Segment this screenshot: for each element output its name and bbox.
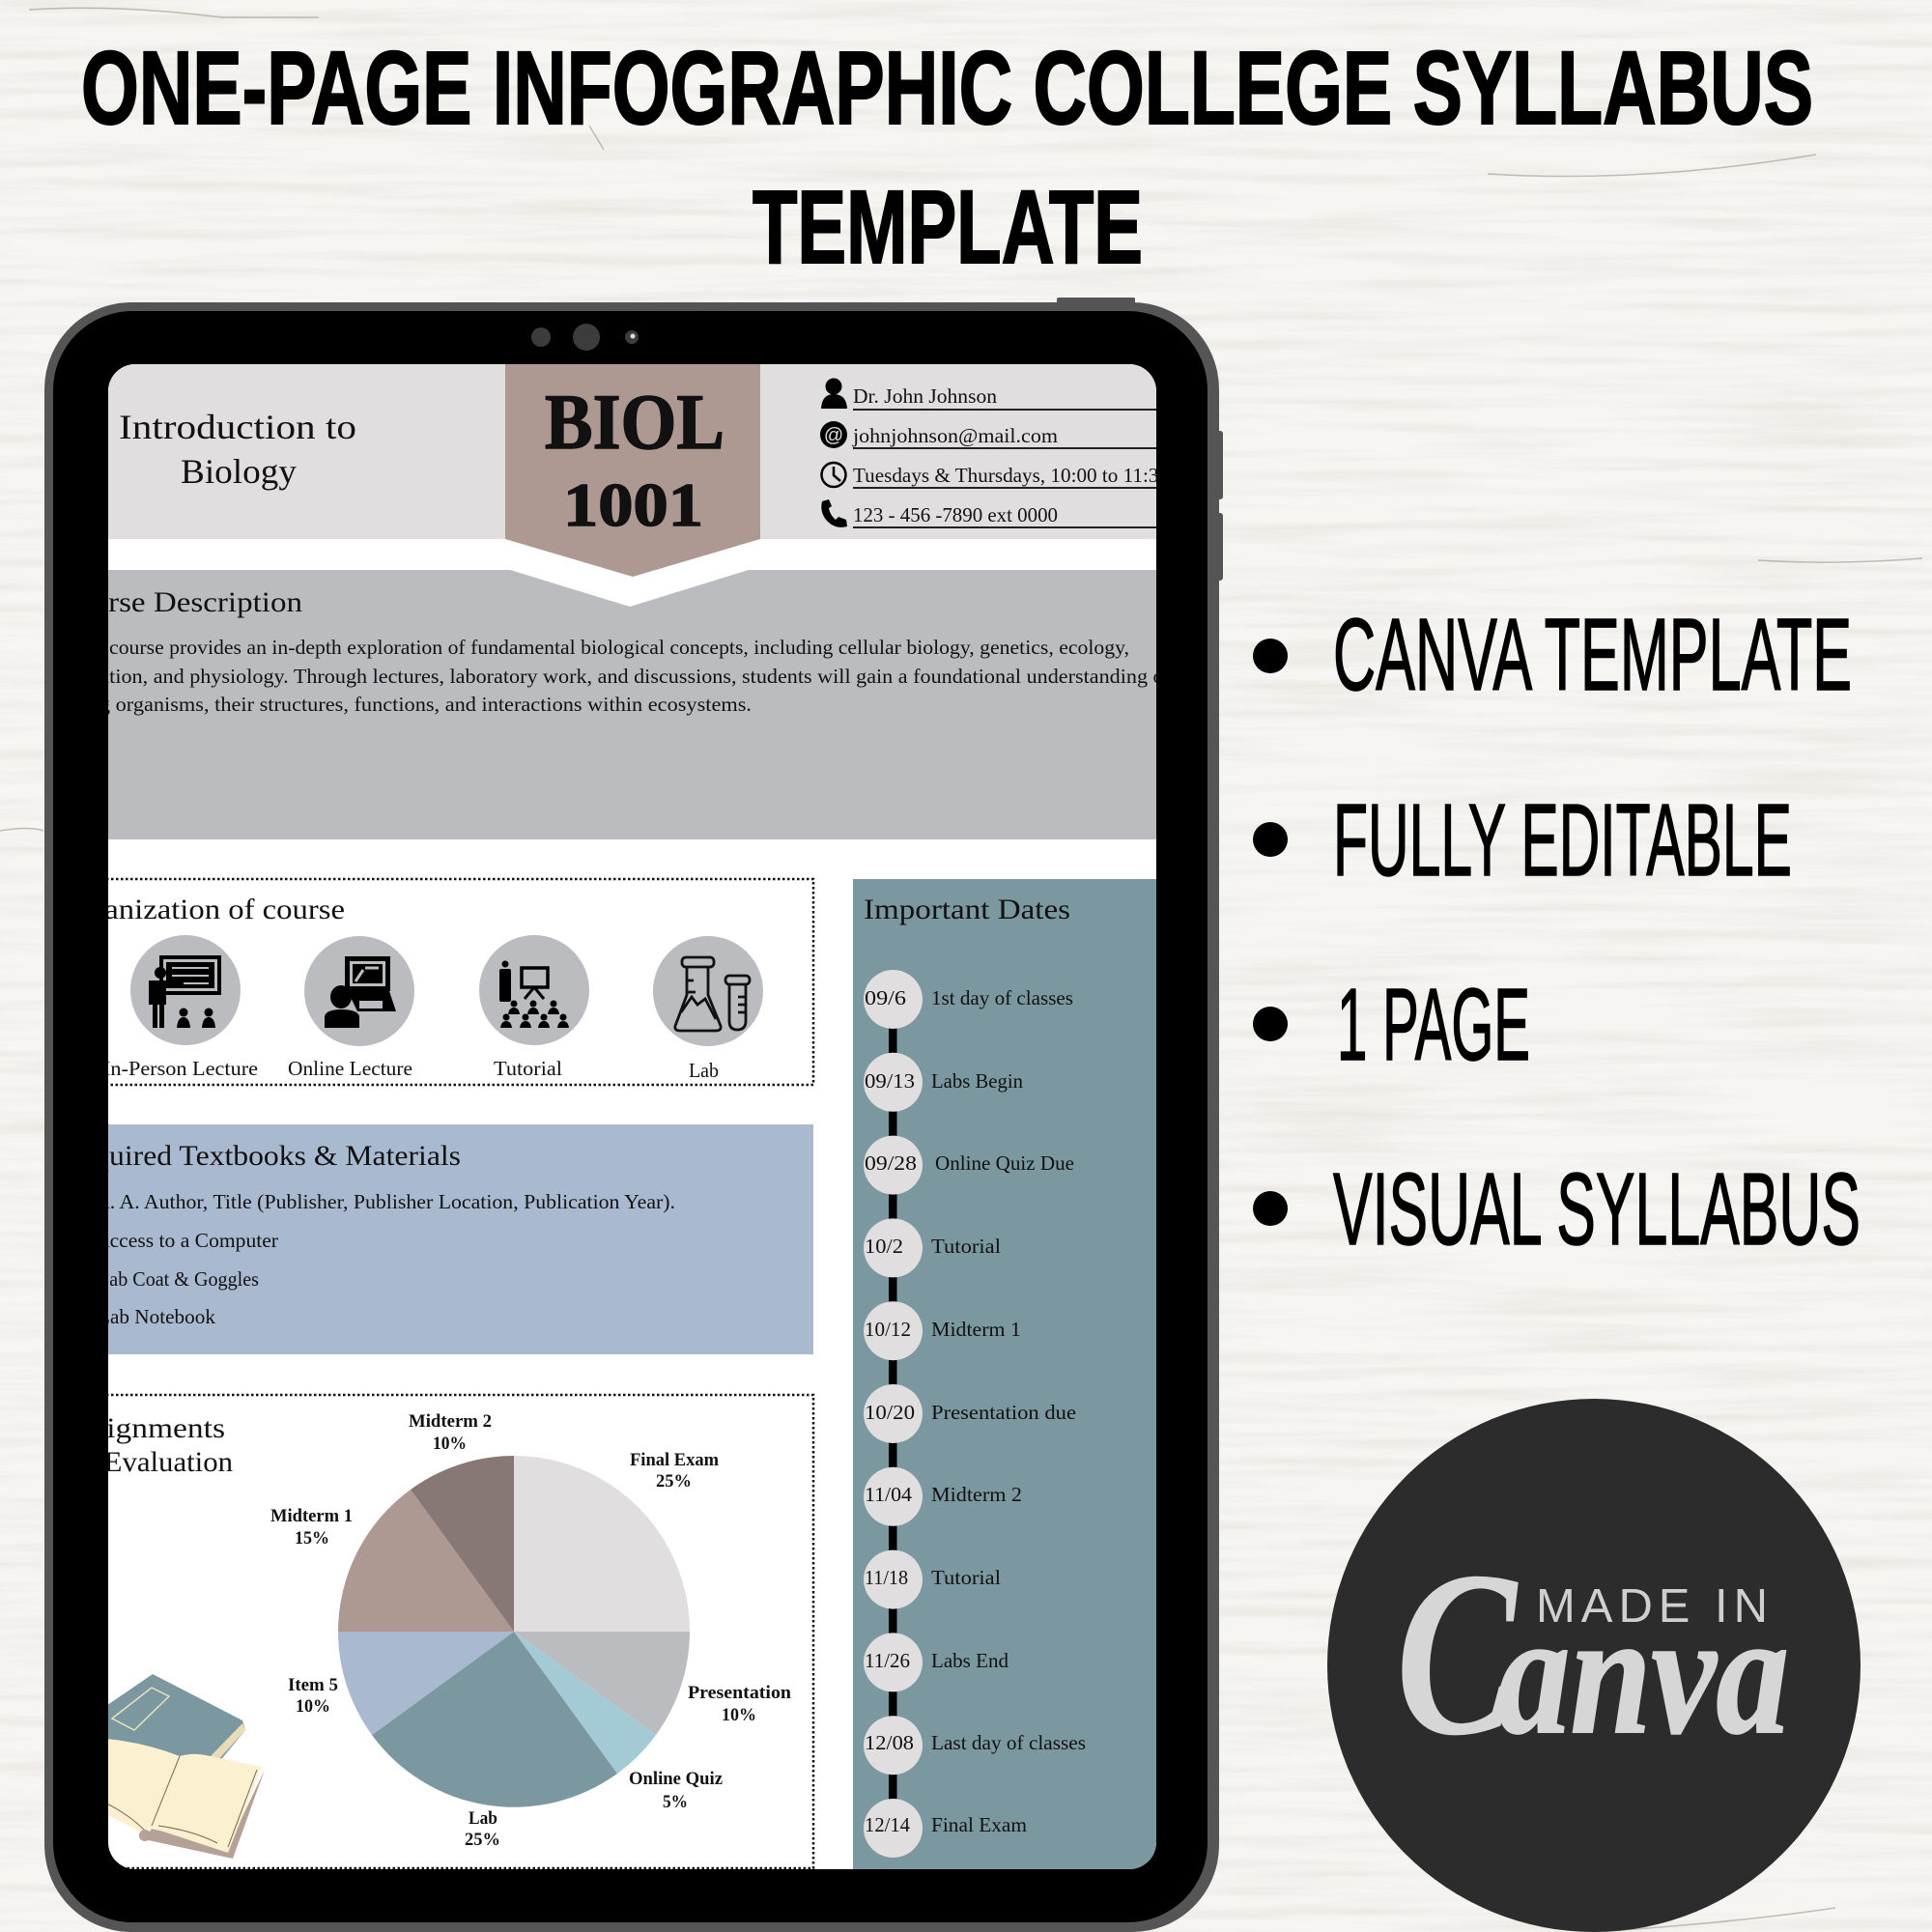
heading: course description: Course Description	[55, 586, 302, 618]
organization labels: Tutorial	[494, 1057, 562, 1080]
materials list: Lab Notebook	[98, 1305, 215, 1328]
date events: Labs Begin	[931, 1069, 1023, 1093]
course code banner: 1001	[563, 470, 703, 539]
pie labels: Online Quiz	[629, 1769, 724, 1789]
materials list: Lab Coat & Goggles	[98, 1267, 259, 1291]
illustration: books	[108, 1674, 265, 1859]
panel: course description	[55, 569, 1171, 839]
course name: Introduction to	[119, 408, 356, 446]
date events: Presentation due	[931, 1401, 1076, 1424]
contact details	[820, 379, 1169, 527]
class time: Tuesdays & Thursdays, 10:00 to 11:30	[853, 464, 1169, 487]
icon: online lecture	[304, 936, 414, 1046]
date labels: 12/08	[865, 1731, 914, 1754]
icon: phone	[821, 499, 847, 527]
pie labels: 15%	[295, 1528, 329, 1548]
pie labels: Final Exam	[630, 1450, 719, 1470]
timeline	[864, 970, 923, 1858]
pie labels	[270, 1411, 791, 1850]
materials list	[95, 1190, 675, 1328]
heading: assignments: & Evaluation	[73, 1446, 233, 1478]
date labels	[865, 986, 917, 1836]
icon: at sign	[820, 421, 847, 448]
heading: important dates: Important Dates	[864, 894, 1070, 925]
icon: person	[821, 379, 847, 409]
description text: evolution, and physiology. Through lectures, laboratory work, and discussions, students will gain a foundational understanding of	[62, 665, 1171, 688]
pie labels: Lab	[469, 1808, 497, 1829]
instructor name: Dr. John Johnson	[853, 384, 997, 408]
date labels: 09/28	[865, 1151, 917, 1175]
date events: Labs End	[931, 1649, 1009, 1672]
course name: Biology	[181, 452, 297, 491]
heading: textbooks: Required Textbooks & Materials	[60, 1140, 461, 1172]
email: johnjohnson@mail.com	[852, 424, 1058, 447]
description text: living organisms, their structures, functions, and interactions within ecosystems.	[60, 693, 752, 716]
pie labels: 5%	[663, 1792, 688, 1812]
course code banner	[505, 364, 760, 577]
heading: assignments	[108, 1418, 233, 1472]
icon: lab flasks	[653, 936, 763, 1046]
pie labels: 10%	[722, 1705, 756, 1725]
pie labels: 25%	[656, 1471, 692, 1492]
title	[81, 29, 1813, 285]
icon: clock	[821, 463, 846, 487]
description text	[108, 639, 1156, 715]
date events	[931, 986, 1086, 1836]
feature bullet list	[1253, 598, 1861, 1266]
phone number: 123 - 456 -7890 ext 0000	[853, 503, 1058, 526]
date labels: 10/2	[865, 1235, 903, 1258]
pie labels: Midterm 1	[270, 1506, 353, 1526]
organization labels: Online Lecture	[288, 1057, 412, 1080]
badge: made in canva: anva	[1497, 1577, 1789, 1770]
badge: made in canva: MADE IN	[1536, 1580, 1768, 1633]
course code banner: BIOL	[545, 378, 724, 466]
date events: 1st day of classes	[931, 986, 1073, 1009]
date labels: 12/14	[865, 1813, 910, 1836]
organization labels: Lab	[689, 1059, 719, 1082]
date labels: 09/13	[865, 1069, 915, 1093]
date events: Tutorial	[931, 1566, 1001, 1589]
date labels: 11/26	[865, 1649, 910, 1672]
icon: in-person lecture	[130, 935, 241, 1045]
heading: organization: Organization of course	[56, 894, 345, 925]
title: TEMPLATE	[753, 168, 1143, 285]
heading: assignments: Assignments	[58, 1412, 225, 1444]
bullet: 1 page	[1253, 968, 1530, 1082]
bullet: fully editable	[1253, 783, 1792, 897]
pie labels: Presentation	[688, 1683, 791, 1703]
pie labels: 10%	[296, 1696, 330, 1717]
bullet: 1 page: 1 PAGE	[1337, 968, 1530, 1082]
pie labels: Midterm 2	[409, 1411, 492, 1432]
date labels: 11/18	[865, 1566, 908, 1589]
date events: Online Quiz Due	[935, 1151, 1074, 1175]
date events: Final Exam	[931, 1813, 1027, 1836]
panel: header band	[108, 364, 1156, 539]
date labels: 10/20	[865, 1401, 915, 1424]
date events: Midterm 1	[931, 1318, 1021, 1341]
date events: Last day of classes	[931, 1731, 1086, 1754]
panel: required textbooks and materials	[60, 1124, 813, 1354]
organization labels	[108, 1061, 719, 1077]
description text: This course provides an in-depth exploration of fundamental biological concepts, including cellular biology, genetics, ecology,	[67, 636, 1129, 659]
date labels: 11/04	[865, 1483, 913, 1506]
date labels: 10/12	[865, 1318, 911, 1341]
tablet device	[44, 298, 1223, 1932]
pie labels: Item 5	[288, 1675, 338, 1695]
date labels: 09/6	[865, 986, 906, 1009]
icon: tutorial	[479, 935, 589, 1045]
icon: at sign: @	[824, 425, 843, 446]
pie chart	[338, 1456, 690, 1807]
date events: Midterm 2	[931, 1483, 1022, 1506]
course name	[119, 408, 356, 491]
organization labels: In-Person Lecture	[103, 1057, 258, 1080]
panel: assignments and evaluation	[58, 1395, 813, 1868]
badge: made in canva: C	[1396, 1522, 1519, 1784]
panel: important dates	[853, 879, 1156, 1869]
screen content	[55, 364, 1171, 1869]
materials list: Access to a Computer	[95, 1229, 278, 1252]
materials list: A. A. Author, Title (Publisher, Publisher Location, Publication Year).	[95, 1190, 675, 1213]
pie labels: 25%	[465, 1830, 500, 1850]
badge: made in canva	[1327, 1399, 1861, 1932]
panel: organization of course	[56, 879, 813, 1085]
date events: Tutorial	[931, 1235, 1001, 1258]
pie labels: 10%	[433, 1434, 467, 1454]
